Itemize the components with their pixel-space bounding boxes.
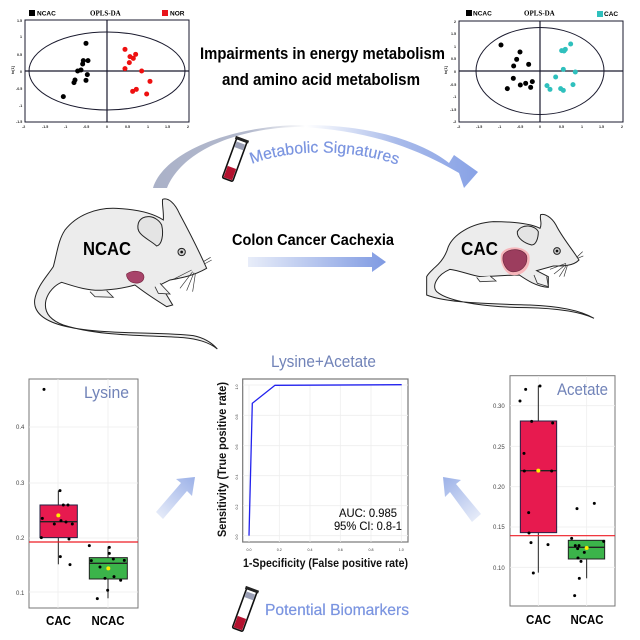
axis tick labels: 0.5 <box>17 53 22 57</box>
label: metabolic signatures: Metabolic Signatures <box>249 141 399 164</box>
title: Lysine+Acetate: Lysine+Acetate <box>271 353 376 371</box>
tick labels: 1.0 <box>235 384 239 390</box>
mouse body <box>35 199 217 349</box>
y axis labels: 0.1 <box>16 591 25 597</box>
arrow: curved arc to CAC mouse <box>153 125 478 188</box>
heading: impairments: Impairments in energy metabolism <box>200 44 445 63</box>
axis tick labels: 2 <box>621 125 623 129</box>
axis tick labels: 1 <box>581 125 583 129</box>
tick labels <box>235 384 404 552</box>
jitter points <box>518 384 605 597</box>
black points <box>498 42 535 91</box>
axis tick labels: 1.5 <box>165 125 170 129</box>
tick labels: 0.2 <box>235 504 239 510</box>
legend and title: NCAC <box>473 10 492 18</box>
axis tick labels: 2 <box>187 125 189 129</box>
tick labels: 0.4 <box>235 474 239 480</box>
axis titles: Sensitivity (True positive rate) <box>217 382 229 537</box>
AUC annotation <box>334 506 402 533</box>
label: colon cancer cachexia: Colon Cancer Cachexia <box>232 232 394 249</box>
axis tick labels: -0.5 <box>517 125 523 129</box>
ROC line <box>249 385 402 536</box>
axis titles: 1-Specificity (False positive rate) <box>243 558 408 570</box>
panel: Acetate boxplot <box>493 376 615 627</box>
x labels: NCAC <box>92 614 124 628</box>
label: CAC: CAC <box>461 239 498 259</box>
axis tick labels: 1.5 <box>17 19 22 23</box>
axis tick labels: 0.5 <box>451 57 456 61</box>
axis tick labels: -1.5 <box>476 125 482 129</box>
heading: impairments: and amino acid metabolism <box>222 70 420 89</box>
tick labels: 0.6 <box>338 548 343 552</box>
plot frame and ellipse <box>25 20 189 122</box>
tick labels: 0.4 <box>308 548 312 552</box>
axis tick labels <box>444 20 623 129</box>
axis tick labels: 0.5 <box>125 125 130 129</box>
axis tick labels: to[1] <box>444 66 448 74</box>
axis tick labels: -1.5 <box>42 125 48 129</box>
panel: OPLS-DA NCAC vs CAC <box>444 10 623 129</box>
arrow: right diagonal <box>443 477 481 522</box>
label: potential biomarkers: Potential Biomarkers <box>265 602 409 619</box>
legend and title: CAC <box>604 11 618 18</box>
tick labels: 0.6 <box>235 444 239 450</box>
axis tick labels: 0.5 <box>559 125 564 129</box>
panel: Lysine boxplot <box>16 379 138 628</box>
x labels: NCAC <box>570 613 604 627</box>
mouse body <box>427 214 594 318</box>
axis tick labels: 1.5 <box>451 32 456 36</box>
heading: impairments <box>200 44 445 89</box>
legend and title: OPLS-DA <box>90 10 121 18</box>
AUC annotation: AUC: 0.985 <box>339 506 397 520</box>
y axis labels: 0.15 <box>493 525 505 531</box>
axis tick labels: -2 <box>453 120 456 124</box>
y axis labels: 0.30 <box>493 404 505 410</box>
tumour with halo <box>501 247 530 275</box>
axis tick labels: 1.5 <box>599 125 604 129</box>
y axis labels: 0.2 <box>16 536 25 542</box>
axis tick labels: 0 <box>454 70 456 74</box>
tick labels: 0.8 <box>235 414 239 420</box>
red points <box>122 47 152 96</box>
panel: ROC curve <box>217 353 408 570</box>
axis tick labels: -1 <box>453 95 456 99</box>
axis tick labels: 1 <box>20 35 22 39</box>
tick labels: 0.8 <box>368 548 374 552</box>
box CAC <box>40 491 77 564</box>
frame and grid <box>29 379 138 608</box>
y axis labels: 0.20 <box>493 485 505 491</box>
tick labels: 0.2 <box>277 548 282 552</box>
legend and title <box>29 10 185 18</box>
axis tick labels <box>11 19 189 129</box>
frame and grid <box>510 376 615 606</box>
y axis labels <box>493 404 505 572</box>
tick labels: 1.0 <box>399 548 404 552</box>
plot frame and ellipse <box>459 21 623 122</box>
axis tick labels: 1 <box>454 45 456 49</box>
axis tick labels: 0 <box>539 125 541 129</box>
axis tick labels: -0.5 <box>450 83 456 87</box>
y axis labels: 0.25 <box>493 445 505 451</box>
axis tick labels: -1.5 <box>16 120 22 124</box>
x labels: CAC <box>526 613 551 627</box>
title: Lysine: Lysine <box>84 383 129 402</box>
axis tick labels: -1 <box>64 125 67 129</box>
axis tick labels: -0.5 <box>83 125 89 129</box>
label: NCAC: NCAC <box>83 239 131 259</box>
y axis labels: 0.4 <box>16 425 25 431</box>
x labels <box>46 614 124 628</box>
tick labels: 0.0 <box>235 534 239 540</box>
icon: blood tube biomarkers <box>231 586 259 632</box>
box NCAC <box>89 547 127 598</box>
y axis labels: 0.10 <box>493 566 505 572</box>
axis titles <box>217 382 408 570</box>
illustration: NCAC mouse <box>35 199 217 349</box>
y axis labels <box>16 425 25 597</box>
axis tick labels: -1.5 <box>450 108 456 112</box>
box CAC <box>520 386 557 573</box>
legend and title: OPLS-DA <box>524 10 555 18</box>
x labels <box>526 613 604 627</box>
illustration: CAC mouse <box>427 214 594 318</box>
axis tick labels: 1 <box>147 125 149 129</box>
legend and title: NOR <box>170 10 185 18</box>
legend and title: NCAC <box>37 10 56 18</box>
box NCAC <box>568 540 605 578</box>
axis tick labels: -1 <box>19 104 22 108</box>
cutoff line <box>29 541 138 543</box>
axis tick labels: 2 <box>454 20 456 24</box>
title: Acetate: Acetate <box>557 380 608 399</box>
tick labels: 0.0 <box>246 548 252 552</box>
teal points <box>544 41 578 93</box>
arrow: left diagonal <box>156 477 195 519</box>
axis tick labels: 0 <box>106 125 108 129</box>
axis tick labels: -0.5 <box>16 87 22 91</box>
axis tick labels: -2 <box>457 125 460 129</box>
panel: OPLS-DA NCAC vs NOR <box>11 10 189 129</box>
axis tick labels: 0 <box>20 70 22 74</box>
axis tick labels: to[1] <box>11 66 15 74</box>
y axis labels: 0.3 <box>16 481 25 487</box>
legend and title <box>466 10 618 18</box>
axis tick labels: -2 <box>22 125 25 129</box>
black points <box>61 41 90 99</box>
axis tick labels: -1 <box>498 125 501 129</box>
arrow: horizontal <box>248 252 386 272</box>
frame and grid <box>243 379 408 542</box>
x labels: CAC <box>46 614 71 628</box>
jitter points <box>40 388 126 600</box>
tumour <box>127 271 144 283</box>
AUC annotation: 95% CI: 0.8-1 <box>334 519 402 533</box>
cutoff line <box>510 535 615 537</box>
icon: blood tube metabolic <box>221 136 249 182</box>
